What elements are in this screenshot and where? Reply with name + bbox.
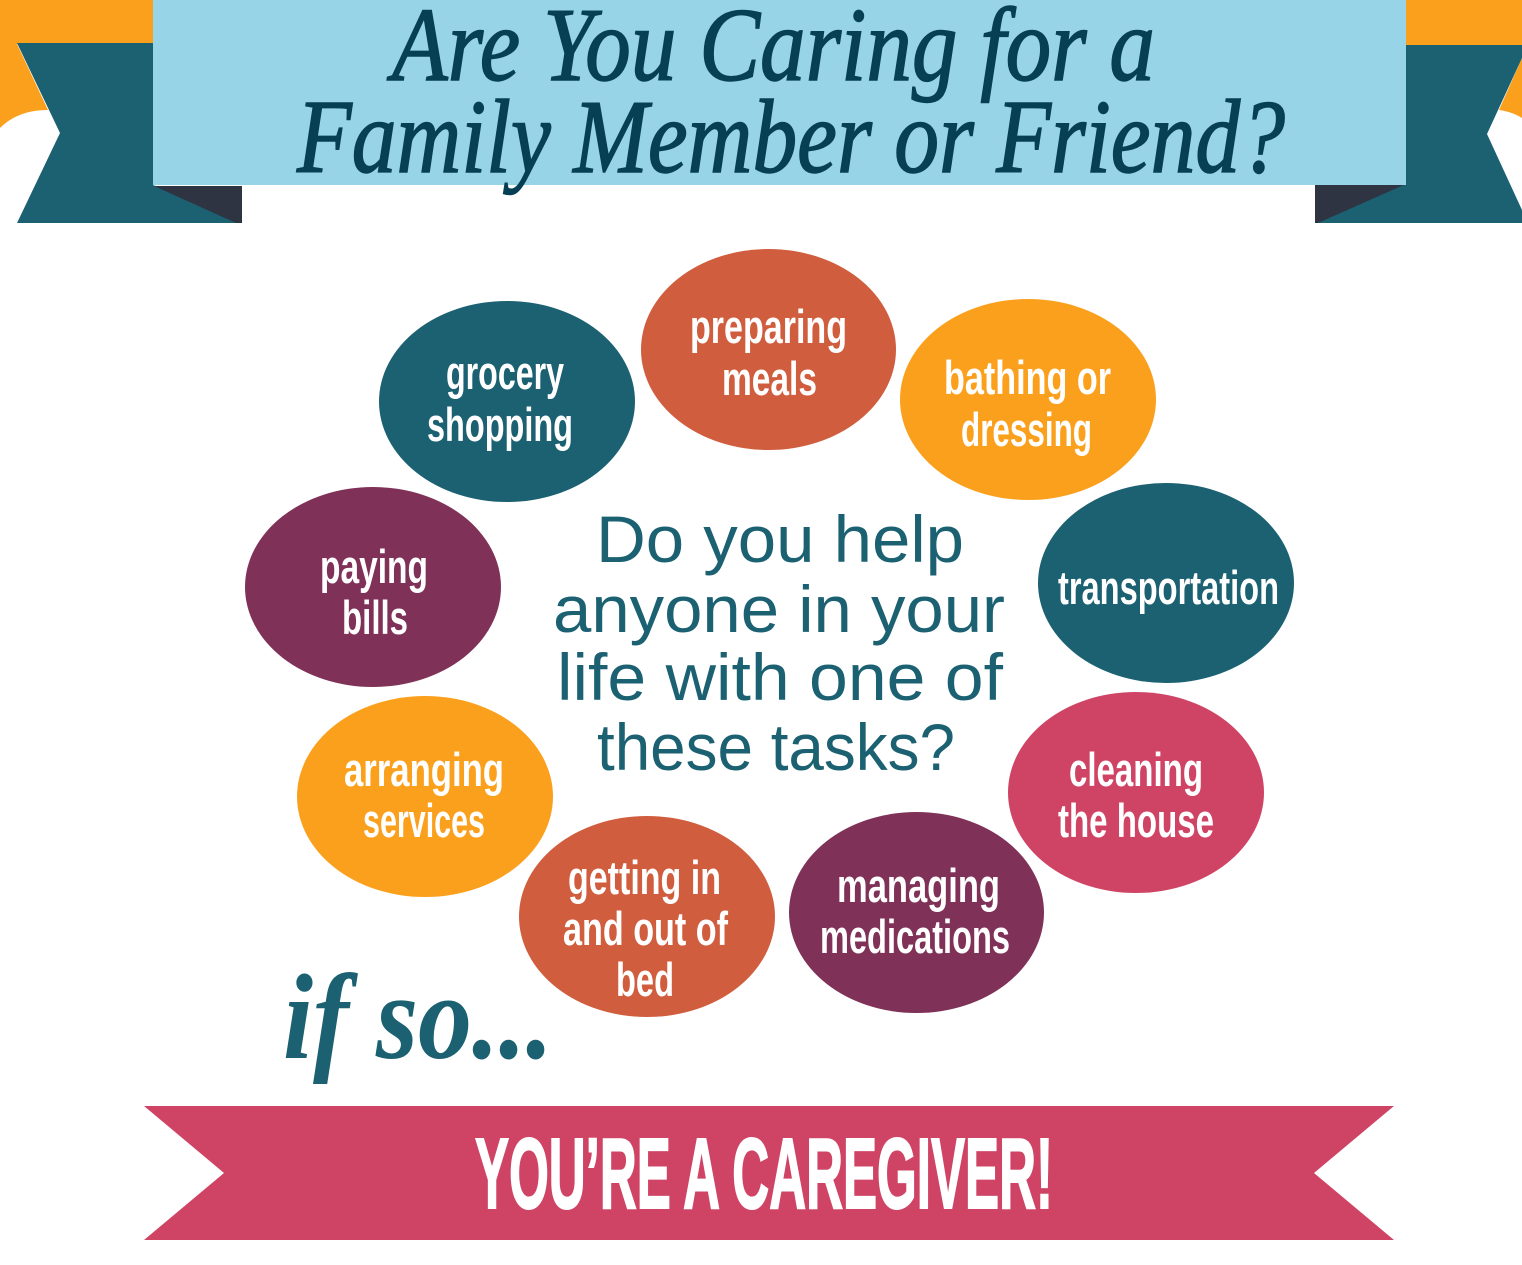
bubble: grocery shopping [379,301,635,502]
central question: anyone in your [553,572,1005,646]
bubble: arranging services [297,696,553,897]
bubble: getting in and out of bed [519,816,775,1017]
title [296,0,1285,195]
bubble: getting in and out of bed: and out of [563,902,728,955]
bubble: grocery shopping: shopping [427,398,573,451]
bubble: preparing meals [641,249,896,450]
bubble: bathing or dressing: bathing or [944,351,1111,404]
bottom banner [144,1106,1394,1240]
bubble: getting in and out of bed: bed [616,953,674,1006]
bubble: arranging services: arranging [344,743,504,796]
left orange corner [0,0,153,128]
right ribbon tail [1315,45,1522,223]
bubble: bathing or dressing: dressing [961,403,1092,456]
central question [553,502,1005,784]
bubble: paying bills: paying [320,540,428,593]
bubble: cleaning the house: cleaning [1069,743,1203,796]
bubble: preparing meals: meals [722,352,817,405]
bubble: bathing or dressing [900,299,1156,500]
bubble: paying bills: bills [342,591,408,644]
bubble: managing medications: medications [820,910,1010,963]
bubble: preparing meals: preparing [690,300,847,353]
bubble: cleaning the house: the house [1058,794,1214,847]
bubble: arranging services: services [363,794,485,847]
bubble: transportation [1038,483,1294,683]
bubble: cleaning the house [1008,692,1264,893]
right orange corner [1406,0,1522,118]
title: Family Member or Friend? [296,78,1285,195]
left ribbon tail [17,43,242,223]
title banner [153,0,1406,185]
bubble: getting in and out of bed: getting in [568,851,721,904]
bubble: paying bills [245,487,501,687]
bubble: managing medications [789,812,1044,1013]
bubble: managing medications: managing [837,859,1000,912]
bubble: transportation: transportation [1058,561,1279,614]
central question: life with one of [557,640,1004,714]
if so text: if so... [283,950,553,1085]
bubble: grocery shopping: grocery [446,346,564,399]
central question: these tasks? [597,710,955,784]
central question: Do you help [596,502,964,576]
